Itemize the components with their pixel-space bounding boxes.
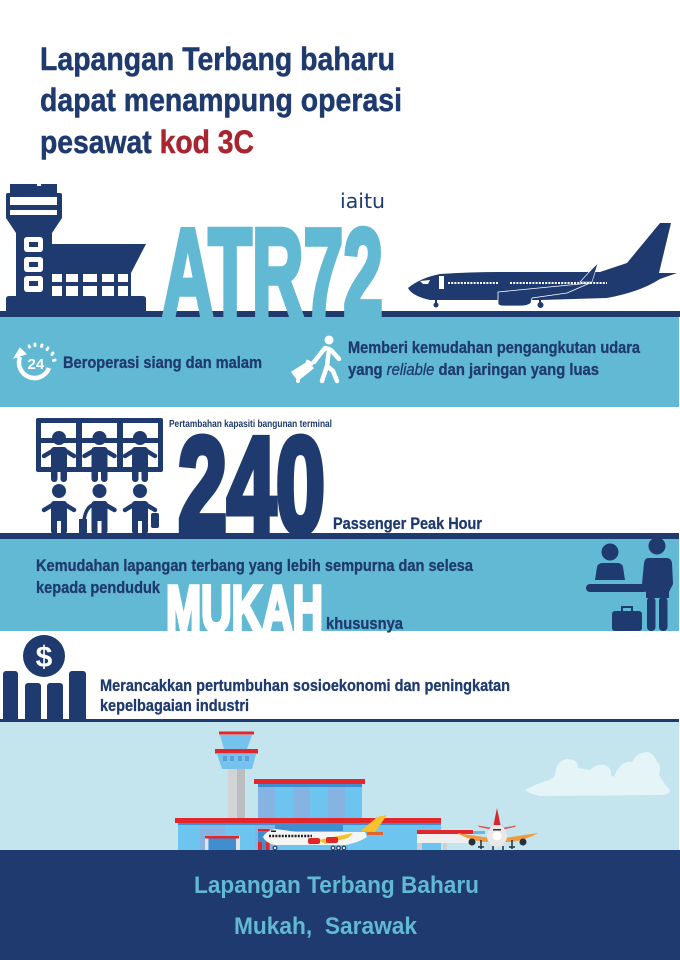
label: iaitu: iaitu [340,189,385,213]
title: dapat menampung operasi [40,82,402,118]
icon: coin and bars [3,635,86,722]
icon: check-in counter [586,538,673,631]
footer text: Mukah, Sarawak [234,913,418,940]
icon: coin and bars: $ [36,641,53,674]
panel: ATR72 band [0,311,680,407]
text: Passenger Peak Hour: Passenger Peak Hour [333,514,482,533]
icon: passengers behind window [36,418,163,534]
text: Kemudahan lapangan terbang [36,556,473,597]
title: pesawat kod 3C [40,124,254,160]
panel: sky [0,722,679,850]
text: Memberi kemudahan: yang reliable dan jaringan yang luas [348,360,599,379]
icon: yellow tail plane [263,815,387,850]
text: Memberi kemudahan: Memberi kemudahan pengangkutan udara [348,338,640,357]
heading: ATR72: ATR72 [162,204,383,343]
text: terminal capacity: Pertambahan kapasiti bangunan terminal [169,419,332,430]
number: 240: 240 [178,409,325,561]
icon: control tower and terminal [6,184,146,312]
footer text: Lapangan Terbang Baharu [194,872,479,899]
title [40,41,402,160]
text: Kemudahan lapangan terbang: kepada penduduk [36,578,160,597]
heading: MUKAH: MUKAH [166,572,323,645]
text: Merancakkan: Merancakkan pertumbuhan sosioekonomi dan peningkatan [100,676,510,695]
text: Kemudahan lapangan terbang: Kemudahan lapangan terbang yang lebih sempurna dan selesa [36,556,473,575]
icon: 24 hour clock: 24 [28,356,45,373]
footer text [194,872,479,940]
text: Beroperasi siang dan malam: Beroperasi siang dan malam [63,353,262,372]
text: khususnya: khususnya [326,614,403,633]
icon: front view plane [457,808,538,850]
title: Lapangan Terbang baharu [40,41,395,77]
panel: footer [0,850,680,960]
text: Memberi kemudahan [348,338,640,379]
icon: cloud [525,752,670,796]
text: Merancakkan: kepelbagaian industri [100,696,249,715]
illustration: airport [175,732,538,850]
text: Merancakkan [100,676,510,715]
icon: 24 hour clock [14,344,55,378]
panel: Mukah band [0,533,679,631]
icon: traveller with suitcase [292,336,339,383]
icon: airliner [408,223,677,308]
